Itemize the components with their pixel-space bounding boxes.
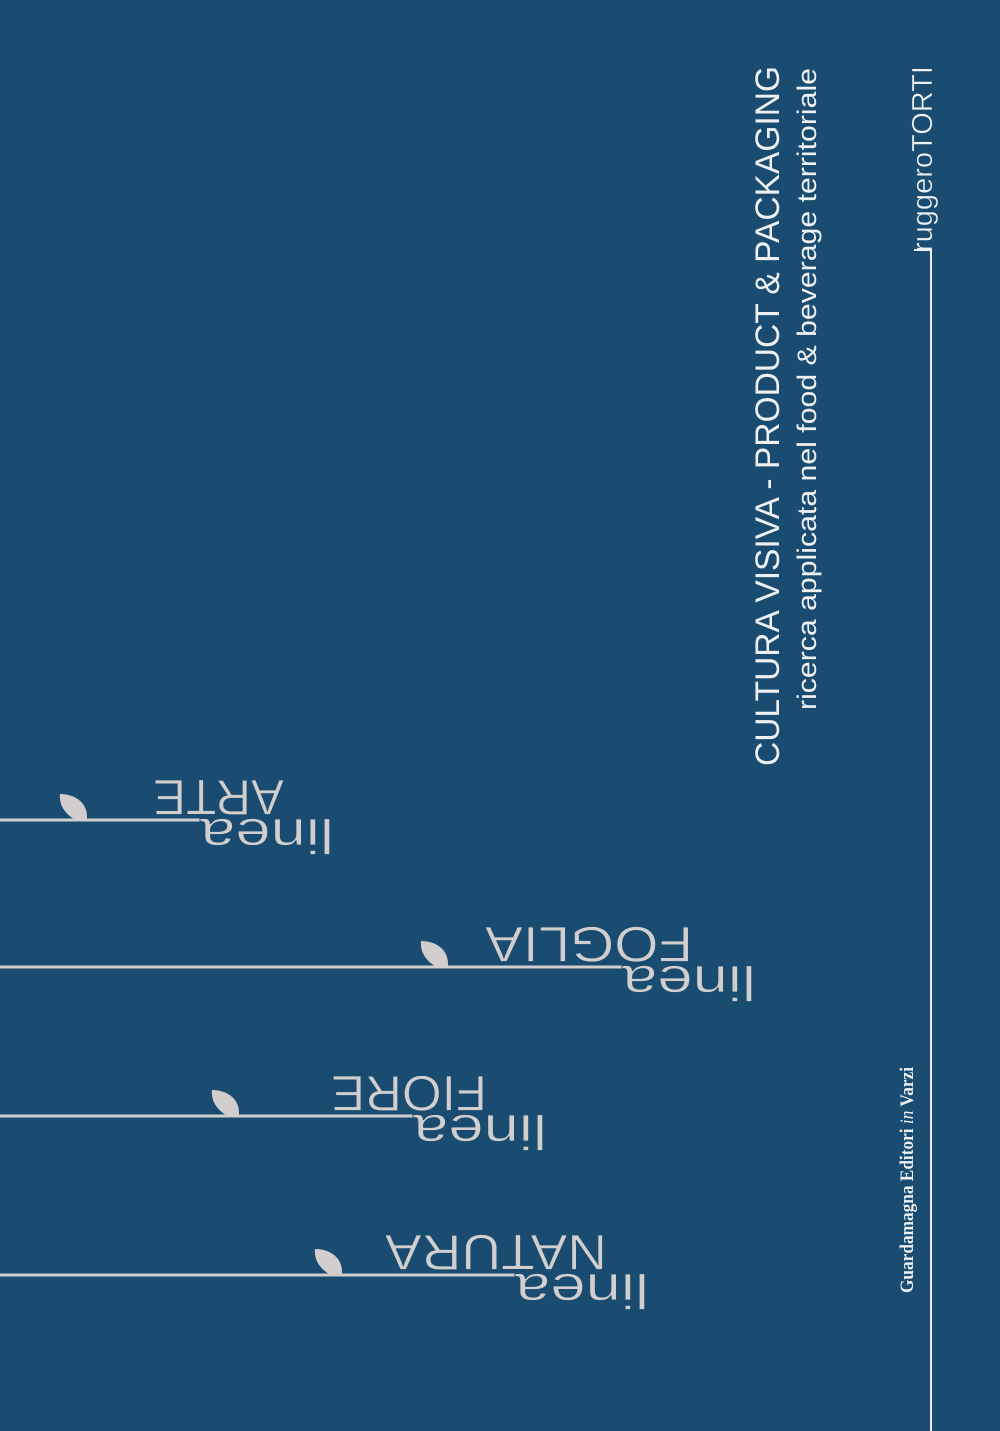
author name: ruggeroTORTI: [907, 66, 939, 252]
icon: leaf: [60, 794, 87, 819]
product line: fiore: [0, 1065, 547, 1158]
label: linea: linea: [621, 955, 756, 1009]
icon: leaf: [421, 941, 448, 966]
label: linea: linea: [412, 1104, 547, 1158]
label: linea: linea: [199, 808, 334, 862]
label: linea: linea: [514, 1263, 649, 1317]
label: NATURA: NATURA: [384, 1224, 607, 1280]
subtitle: ricerca applicata nel food & beverage territoriale: [792, 68, 822, 710]
title: CULTURA VISIVA - PRODUCT & PACKAGING: [749, 66, 787, 766]
product line: natura: [0, 1224, 649, 1317]
author rule: [914, 250, 931, 1431]
label: FIORE: FIORE: [331, 1065, 487, 1121]
stem line: [0, 1114, 417, 1118]
product line: foglia: [0, 916, 756, 1009]
stem line: [0, 818, 204, 822]
stem line: [0, 966, 626, 968]
icon: leaf: [212, 1090, 239, 1115]
icon: leaf: [315, 1249, 342, 1274]
stem line: [0, 1274, 519, 1276]
label: FOGLIA: FOGLIA: [484, 916, 693, 972]
label: ARTE: ARTE: [153, 769, 284, 825]
publisher: Guardamagna Editori in Varzi: [897, 1067, 918, 1293]
product line: arte: [0, 769, 334, 862]
